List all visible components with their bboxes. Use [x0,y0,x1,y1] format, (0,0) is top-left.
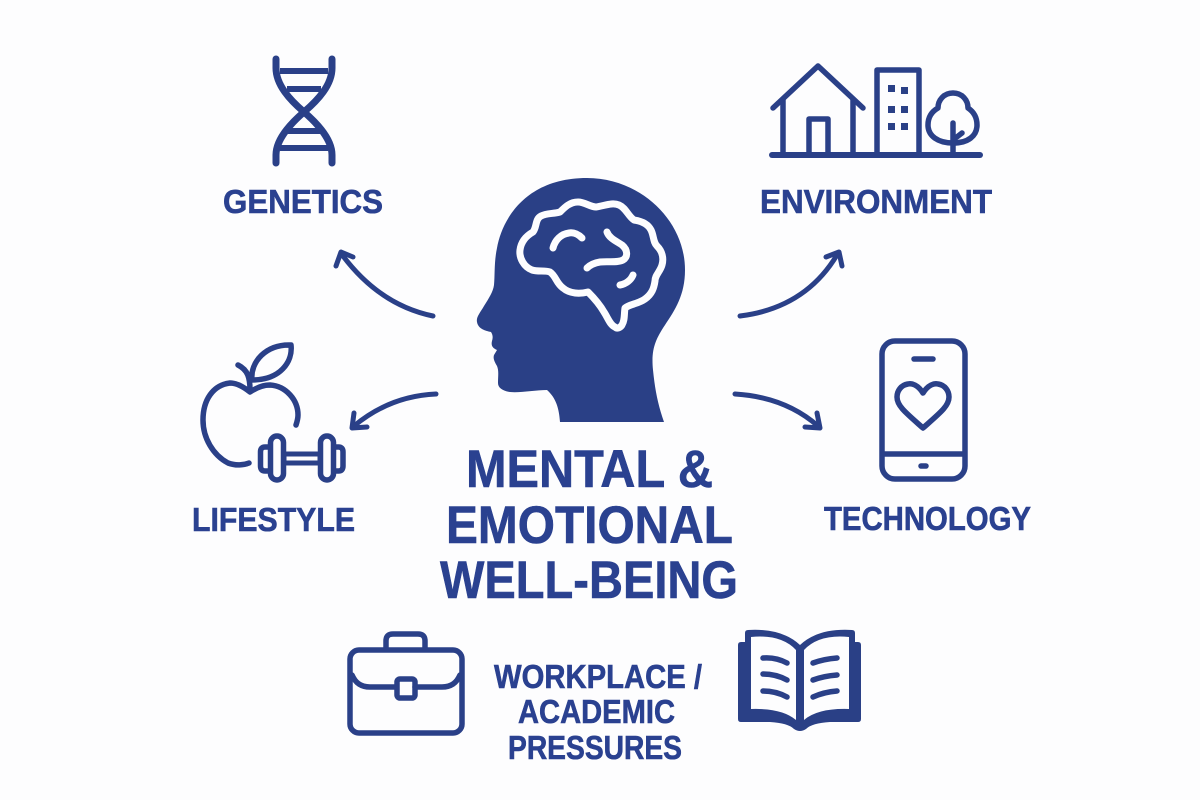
label: workplace / academic pressures [494,658,702,766]
icon: house, building and tree [772,66,980,155]
icon: open book [738,630,861,731]
arrow: to lifestyle [352,394,436,428]
label: workplace / academic pressures: PRESSURES [508,729,682,766]
label: workplace / academic pressures: WORKPLACE / [494,658,702,695]
title: WELL-BEING [440,551,738,610]
label: genetics: GENETICS [223,183,383,220]
icon: head with brain [477,178,685,422]
label: technology: TECHNOLOGY [824,500,1031,537]
arrow: to technology [735,394,820,428]
label: environment: ENVIRONMENT [760,183,992,220]
icon: apple and dumbbell [203,345,343,480]
label: workplace / academic pressures: ACADEMIC [518,693,675,730]
arrow: to environment [740,252,842,316]
brain outline [520,202,663,328]
title: EMOTIONAL [446,496,733,555]
icon: briefcase [350,634,462,733]
icon: DNA helix [276,59,332,163]
head silhouette [477,178,685,422]
icon: smartphone with heart [882,341,965,479]
arrow: to genetics [336,252,433,316]
title [440,440,738,610]
title: MENTAL & [466,440,713,499]
label: lifestyle: LIFESTYLE [192,501,355,538]
